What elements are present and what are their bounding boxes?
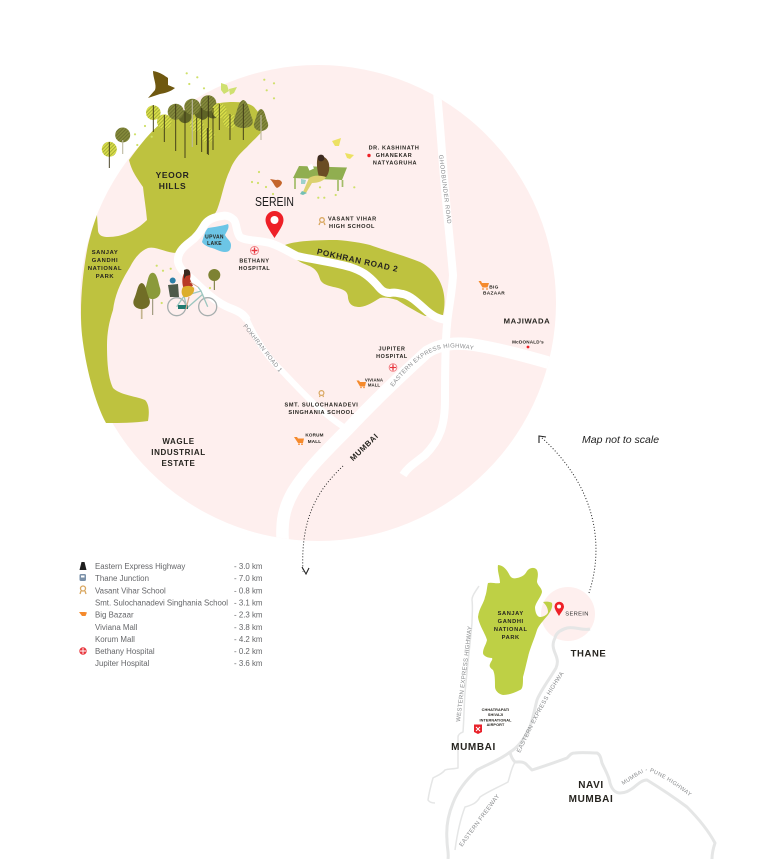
legend rows: Korum Mall	[95, 635, 135, 644]
label: Sanjay Gandhi National Park: GANDHI	[498, 619, 524, 625]
label: McDonald's: McDONALD's	[512, 340, 544, 344]
label: Viviana Mall: VIVIANA	[365, 378, 383, 382]
legend: distances	[79, 562, 263, 668]
roads: regional network	[428, 586, 715, 859]
label: Bethany Hospital: HOSPITAL	[239, 266, 270, 272]
green area: Yeoor Hills and national park	[81, 102, 267, 423]
legend rows: Bethany Hospital	[95, 647, 155, 656]
label: Big Bazaar: BAZAAR	[483, 290, 505, 296]
illustration: yellow butterflies	[332, 138, 354, 159]
label: Eastern Express Highway: EASTERN EXPRESS HIGHWAY	[390, 343, 474, 386]
arrow: dotted curve from Serein to main map	[539, 436, 596, 593]
legend rows: Smt. Sulochanadevi Singhania School	[95, 598, 228, 608]
label: Smt. Sulochanadevi Singhania School: SMT. SULOCHANADEVI	[285, 402, 358, 408]
icon: Big Bazaar cart	[478, 281, 489, 290]
icon: Serein pin	[554, 602, 564, 616]
illustration: woman reading on bench	[293, 155, 347, 195]
label: Jupiter Hospital: HOSPITAL	[376, 354, 408, 360]
label: Chhatrapati Shivaji International Airport: AIRPORT	[487, 723, 505, 727]
icon: Jupiter Hospital cross	[389, 364, 397, 371]
icon: Korum Mall cart	[294, 437, 304, 445]
label: Sanjay Gandhi National Park: NATIONAL	[88, 266, 122, 272]
legend rows: - 3.8 km	[234, 623, 263, 632]
label: Serein: SEREIN	[255, 195, 294, 209]
label: Pokhran Road 2: POKHRAN ROAD 2	[316, 247, 399, 274]
note: map not to scale: Map not to scale	[582, 434, 659, 446]
icon: shopping cart	[79, 612, 87, 616]
label: Dr. Kashinath Ghanekar Natyagruha: DR. KASHINATH	[369, 146, 419, 152]
illustration: bird in flight	[148, 71, 175, 98]
label: Western Express Highway: WESTERN EXPRESS HIGHWAY	[456, 626, 474, 722]
label: Mumbai-Pune Highway: MUMBAI - PUNE HIGHWAY	[622, 768, 692, 796]
lake: Upvan Lake	[202, 224, 231, 252]
label: Korum Mall: MALL	[308, 439, 321, 444]
illustration: woman and child on bicycle	[168, 269, 217, 316]
label: Wagle Industrial Estate: ESTATE	[162, 459, 196, 468]
label: Upvan Lake: LAKE	[207, 241, 222, 247]
label: Sanjay Gandhi National Park: GANDHI	[92, 258, 118, 264]
legend rows: - 0.8 km	[234, 586, 263, 596]
green area: Pokhran Road 2 patch	[285, 240, 444, 316]
label: Thane: THANE	[571, 648, 606, 660]
illustration: trees near bicycle	[133, 269, 220, 319]
label: Sanjay Gandhi National Park: PARK	[96, 274, 114, 280]
legend rows: Vasant Vihar School	[95, 586, 166, 596]
label: Sanjay Gandhi National Park: NATIONAL	[494, 627, 528, 633]
legend rows: - 3.6 km	[234, 659, 263, 668]
legend rows: - 2.3 km	[234, 610, 263, 620]
label: Dr. Kashinath Ghanekar Natyagruha: GHANEKAR	[376, 153, 412, 159]
label: Wagle Industrial Estate: WAGLE	[162, 437, 195, 446]
legend rows: Jupiter Hospital	[95, 659, 150, 668]
label: Big Bazaar: BIG	[489, 284, 499, 290]
road: Eastern Express Highway	[282, 344, 560, 545]
legend rows: - 4.2 km	[234, 635, 263, 644]
icon: Serein location pin	[266, 211, 284, 238]
label: Chhatrapati Shivaji International Airport: SHIVAJI	[488, 713, 503, 717]
marker: Natyagruha dot	[367, 154, 371, 157]
label: Navi Mumbai: NAVI	[578, 780, 604, 791]
legend rows: Big Bazaar	[95, 610, 134, 620]
road: Pokhran Road 1	[247, 320, 345, 428]
label: Ghodbunder Road: GHODBUNDER ROAD	[437, 155, 452, 225]
legend rows: Viviana Mall	[95, 623, 138, 632]
label: Smt. Sulochanadevi Singhania School: SINGHANIA SCHOOL	[288, 410, 355, 416]
icon: school	[80, 586, 86, 594]
label: Pokhran Road 1: POKHRAN ROAD 1	[241, 324, 283, 374]
legend rows: Thane Junction	[95, 574, 149, 583]
label: Wagle Industrial Estate: INDUSTRIAL	[151, 448, 206, 457]
label: Chhatrapati Shivaji International Airport: CHHATRAPATI	[482, 708, 509, 712]
label: Majiwada: MAJIWADA	[504, 316, 550, 326]
label: Sanjay Gandhi National Park: SANJAY	[92, 250, 118, 256]
label: Sanjay Gandhi National Park: PARK	[502, 635, 520, 641]
label: Eastern Express Highway: EASTERN EXPRESS HIGHWAY	[516, 672, 564, 753]
road: Mumbai-Pune Highway	[510, 752, 715, 859]
label: Bethany Hospital: BETHANY	[239, 258, 270, 264]
illustration: small robin	[270, 179, 282, 188]
label: Eastern Freeway: EASTERN FREEWAY	[459, 794, 501, 848]
label: Mumbai: MUMBAI	[451, 742, 496, 753]
label: Yeoor Hills: HILLS	[159, 181, 186, 191]
green: Sanjay Gandhi National Park	[478, 565, 552, 695]
main circular map	[80, 65, 556, 541]
road: Western Express Highway	[428, 586, 479, 803]
legend rows: - 7.0 km	[234, 574, 263, 583]
icon: Bethany Hospital cross	[250, 246, 258, 254]
label: Dr. Kashinath Ghanekar Natyagruha: NATYAGRUHA	[373, 160, 417, 166]
label: Chhatrapati Shivaji International Airport: INTERNATIONAL	[479, 718, 512, 722]
label: Jupiter Hospital: JUPITER	[379, 346, 405, 352]
icon: Vasant Vihar school	[319, 218, 325, 225]
road: Pokhran Road 2	[178, 216, 447, 320]
legend rows: - 3.1 km	[234, 598, 263, 608]
illustration: forest of trees on Yeoor Hills	[102, 95, 268, 168]
label: Upvan Lake: UPVAN	[205, 234, 224, 240]
label: Vasant Vihar High School: VASANT VIHAR	[328, 216, 377, 222]
legend rows: - 0.2 km	[234, 647, 263, 656]
label: Sanjay Gandhi National Park: SANJAY	[498, 611, 524, 617]
label: Navi Mumbai: MUMBAI	[569, 794, 613, 805]
icon: train	[80, 574, 86, 581]
panel: pink map circle	[80, 65, 556, 541]
roads in main map	[174, 95, 550, 539]
illustration: green butterfly	[221, 83, 237, 95]
label: Mumbai direction: MUMBAI	[348, 432, 380, 463]
icon: Viviana Mall cart	[356, 380, 366, 388]
road: Eastern Express Highway	[447, 628, 590, 859]
icon: Singhania school	[319, 391, 324, 397]
arrow: dotted curve to Mumbai legend side	[302, 466, 343, 574]
icon: highway	[80, 562, 86, 570]
road: Ghodbunder Road	[403, 60, 453, 475]
label: Yeoor Hills: YEOOR	[156, 170, 189, 180]
legend rows: Eastern Express Highway	[95, 562, 185, 571]
label: Viviana Mall: MALL	[368, 382, 380, 388]
legend rows: - 3.0 km	[234, 562, 263, 571]
road: Eastern Freeway	[455, 762, 515, 850]
icon: hospital	[79, 647, 87, 655]
legend rows	[95, 562, 263, 668]
decorative dots	[134, 72, 355, 304]
icon: airport marker	[474, 724, 482, 734]
marker: McDonald's dot	[527, 346, 529, 348]
pink locator circle	[541, 587, 595, 641]
label: Vasant Vihar High School: HIGH SCHOOL	[329, 224, 375, 230]
label: Korum Mall: KORUM	[305, 432, 324, 438]
label: Serein: SEREIN	[565, 612, 589, 618]
